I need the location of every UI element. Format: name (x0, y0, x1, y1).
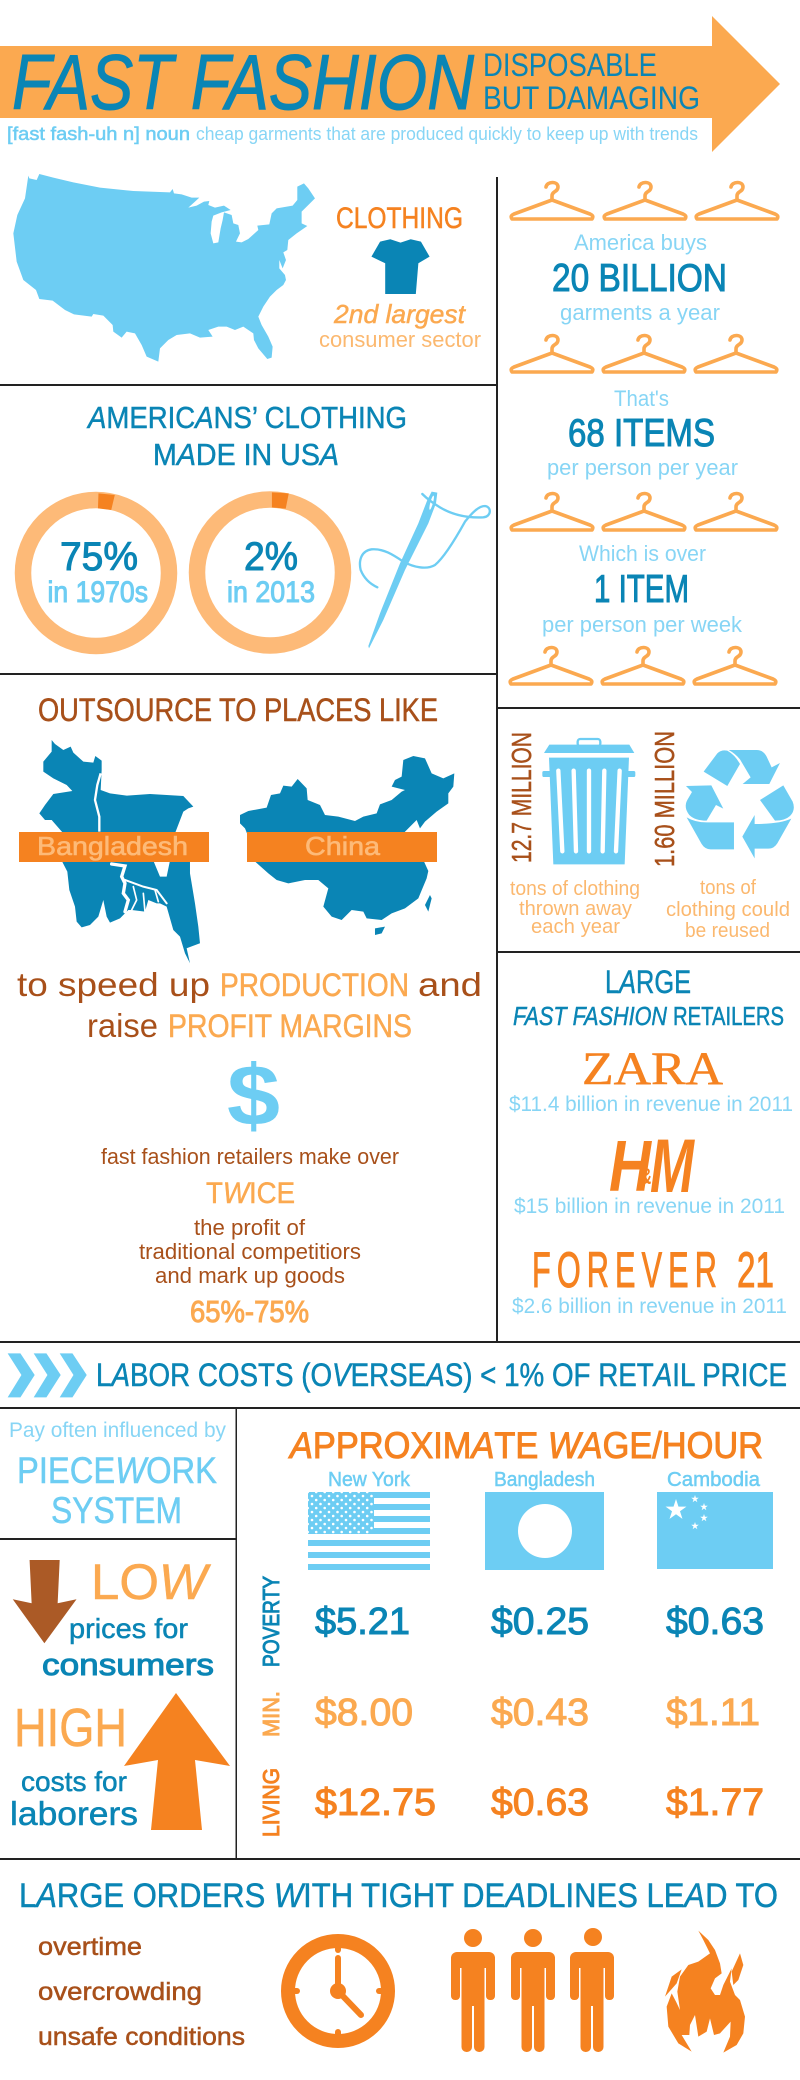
heading: approximate wage/hour: APPROXIMATE WAGE/HOUR (288, 1425, 763, 1466)
stat: 20 billion: 20 BILLION (552, 257, 727, 300)
text: h&m revenue: $15 billion in revenue in 2011 (514, 1195, 785, 1218)
text: that's: That's (614, 386, 669, 411)
text: per person per year: per person per year (547, 455, 738, 480)
heading: system: SYSTEM (51, 1490, 182, 1531)
text: tons could be reused (666, 877, 790, 942)
panel: large retailers (509, 964, 793, 1318)
panel: clothing waste (506, 731, 794, 942)
text: costs for: costs for (21, 1766, 127, 1797)
label band: bangladesh: Bangladesh (37, 831, 188, 861)
panel: made in usa (23, 400, 490, 648)
heading: piecework: PIECEWORK (17, 1450, 217, 1491)
flag: bangladesh (485, 1492, 604, 1570)
text: tons thrown away (510, 878, 640, 938)
subtitle: disposable: DISPOSABLE (483, 47, 657, 83)
row: minimum values: $8.00 (315, 1692, 413, 1734)
icon: t-shirt (371, 239, 430, 294)
logo: h&m (609, 1124, 695, 1209)
row: minimum values (315, 1692, 760, 1734)
label band: china (247, 831, 437, 862)
stat: 12.7 million: 12.7 MILLION (506, 732, 537, 863)
map: china (240, 756, 454, 935)
row: living values: $0.63 (491, 1782, 589, 1824)
text: raise profit margins: PROFIT MARGINS (168, 1008, 412, 1044)
text: tons could be reused: be reused (685, 920, 770, 942)
map: united states (13, 174, 315, 362)
row: living values (315, 1782, 764, 1824)
row: minimum values: $0.43 (491, 1692, 589, 1734)
donut: 75% in 1970s: 75% (60, 535, 138, 579)
text: profit of competitors: and mark up goods (155, 1263, 345, 1288)
panel: outsourcing (17, 692, 482, 1329)
row label: min.: MIN. (258, 1691, 284, 1737)
heading: labor costs: LABOR COSTS (OVERSEAS) < 1% OF RETAIL PRICE (96, 1357, 787, 1393)
flag: cambodia (657, 1492, 773, 1569)
donut: 2% in 2013: in 2013 (227, 576, 315, 609)
text: laborers: laborers (10, 1795, 138, 1832)
heading: fast fashion retailers: FAST FASHION (513, 1001, 667, 1031)
stat: 1.60 million: 1.60 MILLION (649, 731, 680, 867)
logo: h&m: H (609, 1127, 653, 1207)
donut: 2% in 2013: 2% (244, 535, 298, 579)
icon: chevrons (8, 1353, 87, 1397)
title: fast fashion: FAST FASHION (12, 38, 475, 126)
text: america buys: America buys (574, 230, 707, 255)
text: which is over: Which is over (579, 541, 706, 566)
row: living values: $1.77 (666, 1782, 764, 1824)
arrow: up (124, 1693, 230, 1830)
row label: living: LIVING (258, 1768, 284, 1837)
panel: large orders (19, 1877, 778, 2053)
label band: china: China (305, 831, 381, 861)
text: retailers make over: fast fashion retailers make over (101, 1144, 399, 1169)
stat: 65%-75%: 65%-75% (190, 1294, 309, 1329)
row: poverty values: $5.21 (315, 1601, 410, 1643)
list: effects: unsafe conditions (38, 2023, 245, 2051)
banner: labor costs (8, 1353, 787, 1397)
text: profit of competitors: the profit of (194, 1215, 306, 1240)
label: bangladesh: Bangladesh (494, 1469, 595, 1491)
heading: outsource to places like: OUTSOURCE TO PLACES LIKE (38, 692, 438, 728)
panel: wage table (258, 1425, 773, 1837)
list: effects: overcrowding (38, 1978, 202, 2006)
subtitle: but damaging: BUT DAMAGING (483, 80, 700, 116)
text: tons thrown away: tons of clothing (510, 878, 640, 900)
logo: forever 21: 21 (737, 1242, 774, 1298)
icon: clock (288, 1941, 388, 2041)
map: bangladesh (39, 740, 200, 963)
text: profit of competitors (139, 1215, 361, 1288)
arrow shape (0, 16, 780, 152)
list: effects: overtime (38, 1933, 142, 1961)
text: to speed up production and: PRODUCTION (220, 967, 409, 1003)
text: raise profit margins (87, 1007, 412, 1044)
text: per person per week: per person per week (542, 612, 743, 637)
icon: flame (665, 1931, 745, 2053)
text: tons thrown away: each year (531, 916, 620, 938)
donut: 75% in 1970s: in 1970s (48, 576, 148, 609)
text: prices for: prices for (69, 1613, 188, 1644)
donut: 2% in 2013 (197, 492, 343, 646)
text: to speed up production and (17, 966, 482, 1003)
text: pay often influenced by: Pay often influenced by (9, 1419, 226, 1442)
icon: trash can (542, 739, 635, 864)
text: tons could be reused: clothing could (666, 899, 790, 921)
text: high: HIGH (14, 1698, 127, 1758)
row: poverty values: $0.25 (491, 1601, 589, 1643)
flag: usa (308, 1492, 430, 1570)
text: tons could be reused: tons of (700, 877, 756, 899)
text: to speed up production and: and (418, 966, 482, 1003)
text: profit of competitors: traditional competitiors (139, 1239, 361, 1264)
donut: 75% in 1970s (23, 493, 169, 646)
text: consumers: consumers (42, 1647, 214, 1682)
row: poverty values: $0.63 (666, 1601, 764, 1643)
panel: clothing sector (13, 174, 481, 362)
heading: americans' clothing: AMERICANS’ CLOTHING (86, 400, 407, 435)
logo: zara: ZARA (582, 1043, 723, 1095)
text: zara revenue: $11.4 billion in revenue in 2011 (509, 1093, 793, 1116)
text: to speed up production and: to speed up (17, 966, 210, 1003)
icon row: hangers 3 (511, 494, 777, 530)
icon: dollar sign: $ (227, 1048, 280, 1144)
row: poverty values (315, 1601, 764, 1643)
header arrow banner (0, 16, 780, 152)
label band: bangladesh (19, 831, 209, 862)
row: minimum values: $1.11 (666, 1692, 760, 1734)
icon row: hangers 4 (510, 648, 776, 684)
panel: low prices high costs (10, 1554, 230, 1832)
definition line: cheap garments that are produced quickly to keep up with trends (196, 124, 698, 144)
row label: poverty: POVERTY (258, 1576, 284, 1667)
heading: large: LARGE (605, 964, 691, 1000)
text: consumer sector: consumer sector (319, 327, 481, 352)
text: low: LOW (91, 1554, 212, 1610)
heading: clothing: CLOTHING (336, 202, 463, 235)
arrow: down (13, 1560, 77, 1643)
heading: fast fashion retailers (513, 1001, 784, 1031)
label: cambodia: Cambodia (667, 1469, 761, 1491)
text: garments a year: garments a year (560, 300, 720, 325)
label: new york: New York (328, 1469, 411, 1491)
stat: 68 items: 68 ITEMS (568, 412, 715, 455)
heading: large orders: LARGE ORDERS WITH TIGHT DEADLINES LEAD TO (19, 1877, 778, 1915)
stat: 1 item: 1 ITEM (594, 568, 689, 611)
text: tons thrown away: thrown away (519, 898, 632, 920)
icon: three people (451, 1928, 614, 2052)
icon row: hangers 1 (511, 182, 778, 219)
icon: needle and thread (360, 492, 490, 648)
text: forever 21 revenue: $2.6 billion in revenue in 2011 (512, 1295, 787, 1318)
text: twice: TWICE (206, 1177, 295, 1210)
text: raise profit margins: raise (87, 1007, 158, 1044)
list: effects (38, 1933, 245, 2051)
panel: garments purchased (510, 182, 778, 684)
icon: recycle symbol (686, 750, 794, 858)
logo: h&m: & (640, 1164, 652, 1189)
definition line: [fast fash-uh n] noun (7, 124, 190, 144)
text: 2nd largest: 2nd largest (333, 299, 467, 329)
logo: h&m: M (650, 1124, 695, 1209)
icon row: hangers 2 (511, 336, 777, 372)
heading: made in usa: MADE IN USA (153, 437, 339, 472)
panel: piecework (9, 1419, 226, 1531)
row: living values: $12.75 (315, 1782, 436, 1824)
